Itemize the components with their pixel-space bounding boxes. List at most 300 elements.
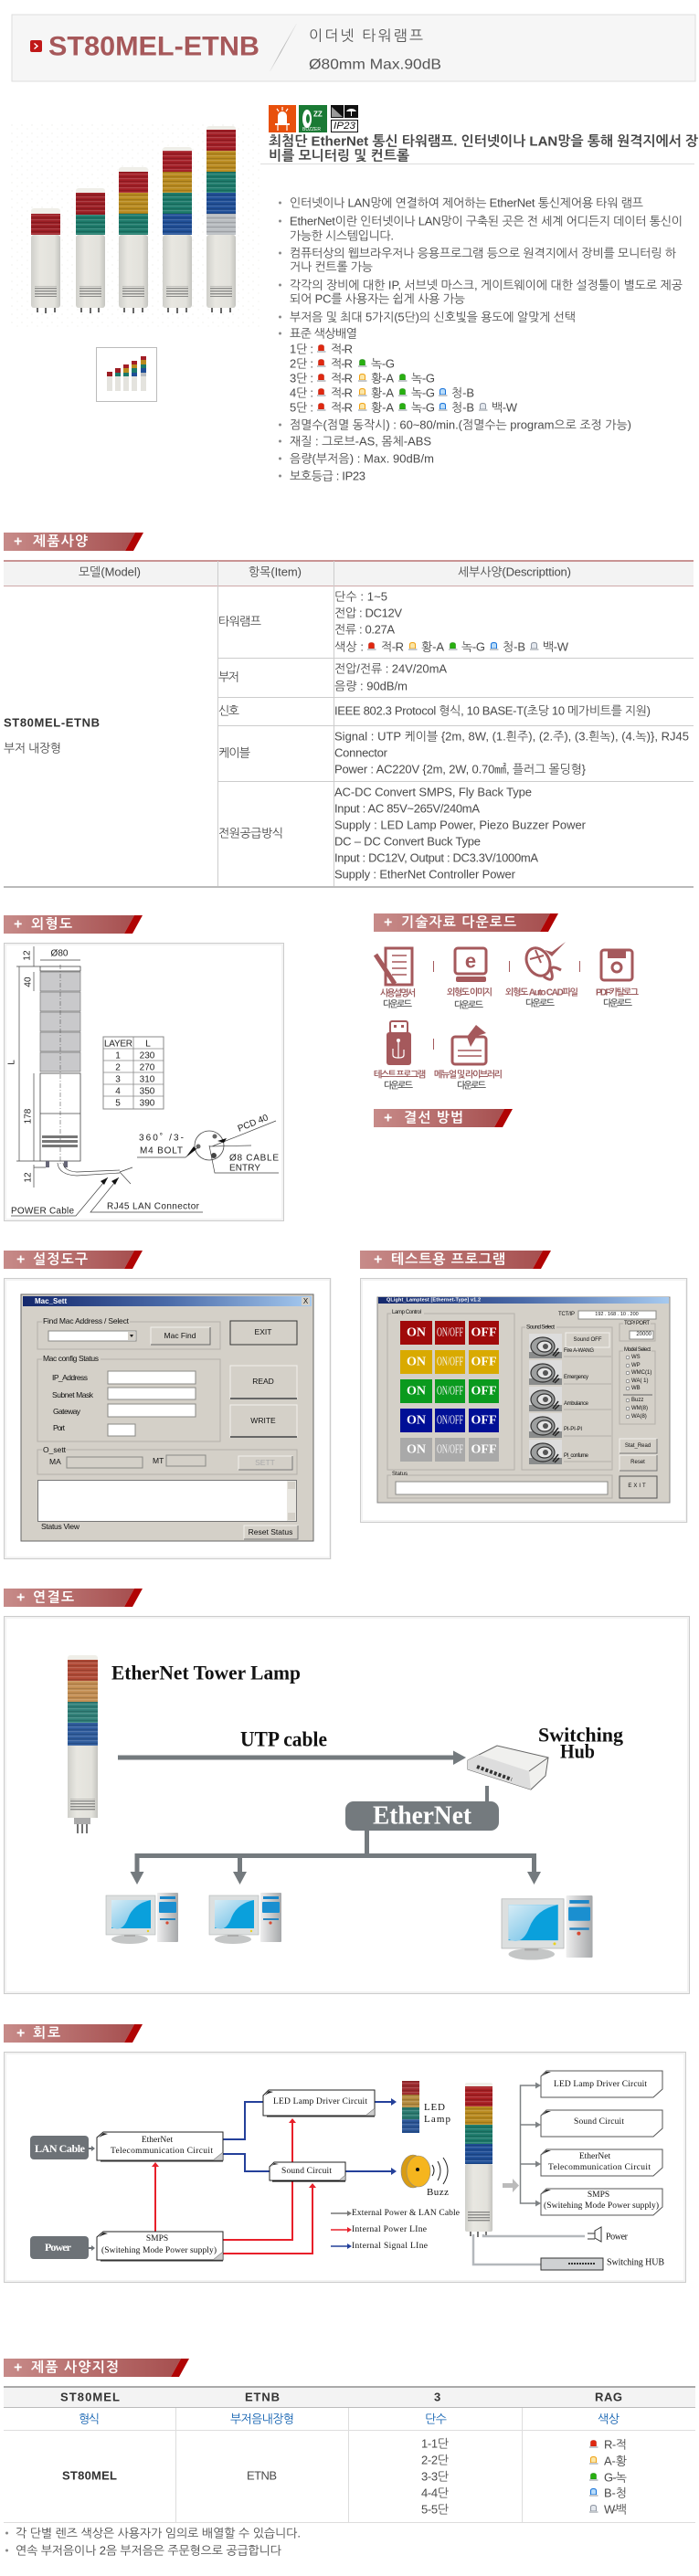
section banner: outline drawing: + bbox=[14, 917, 22, 932]
tower 4 layers bbox=[163, 147, 192, 313]
layer length table: 4 bbox=[115, 1087, 121, 1096]
section banner: product ordering: + bbox=[14, 2360, 22, 2375]
arrowheads: power bbox=[152, 2118, 316, 2188]
separator bbox=[579, 961, 580, 972]
cable description: Power : AC220V {2m, 2W, 0.70㎟, 플러그 몰딩형} bbox=[334, 762, 587, 776]
sound circuit box bbox=[270, 2162, 345, 2181]
exit button: EXIT bbox=[255, 1327, 271, 1336]
EtherNet telecommunication circuit box: EtherNet bbox=[142, 2136, 174, 2145]
layer length table: 3 bbox=[115, 1074, 121, 1085]
model select group: Model Select bbox=[624, 1347, 651, 1353]
intro heading bbox=[260, 133, 698, 164]
section banner: wiring method bbox=[374, 1109, 513, 1127]
icon: manual and library: 메뉴얼 및 라이브러리 bbox=[434, 1069, 503, 1080]
icon: PDF catalog bbox=[596, 950, 640, 1008]
status view: Reset Status bbox=[249, 1527, 292, 1536]
tower outline drawing bbox=[40, 965, 80, 1167]
layer length table: 390 bbox=[140, 1098, 155, 1109]
sound select group: Sound Select bbox=[526, 1325, 555, 1330]
cable drawing: RJ45 LAN Connector bbox=[107, 1202, 200, 1211]
thumbnail image bbox=[97, 347, 157, 402]
sound select group: PI_confume bbox=[564, 1453, 589, 1459]
icon: outline image bbox=[447, 948, 492, 1010]
section banner: configuration tool: + bbox=[16, 1251, 25, 1268]
feature list: 재질 : 그로브-AS, 몸체-ABS bbox=[290, 435, 431, 448]
tower lamp description: 황-A bbox=[421, 639, 444, 654]
layer length table: LAYER bbox=[104, 1040, 132, 1049]
icon: buzzer bbox=[299, 105, 327, 132]
yellow buttons: ON/OFF bbox=[437, 1356, 463, 1368]
type value: ETNB bbox=[247, 2468, 277, 2483]
tower 2 layers bbox=[76, 188, 105, 313]
O_sett group: MA bbox=[49, 1457, 61, 1466]
section banner: circuit bbox=[4, 2024, 143, 2043]
LED lamp image: LED bbox=[424, 2102, 445, 2113]
icon: PDF catalog: PDF카탈로그 bbox=[596, 987, 640, 998]
component box: SMPS: (Switehing Mode Power supply) bbox=[544, 2201, 659, 2211]
hub label bbox=[538, 1723, 623, 1763]
arrow: tower to components bbox=[503, 2179, 519, 2192]
feature list: 각각의 장비에 대한 IP, 서브넷 마스크, 게이트웨이에 대한 설정툴이 별도로 제공 bbox=[290, 278, 683, 292]
footnotes: 연속 부저음이나 2음 부저음은 주문형으로 공급합니다 bbox=[16, 2543, 281, 2558]
TCP/IP fields: 20000 bbox=[636, 1332, 652, 1337]
white buttons: ON/OFF bbox=[437, 1443, 463, 1456]
bolt detail drawing: 360˚ /3- bbox=[139, 1133, 184, 1144]
TCP/IP fields: TCT/IP bbox=[558, 1312, 575, 1317]
separator bbox=[433, 1039, 434, 1050]
dimension labels: 178 bbox=[24, 1108, 33, 1124]
icon: AutoCAD file: 다운로드 bbox=[525, 998, 556, 1008]
color arrangement rows: 2단 : bbox=[290, 356, 313, 371]
footnotes: 각 단별 렌즈 색상은 사용자가 임의로 배열할 수 있습니다. bbox=[16, 2527, 301, 2539]
green buttons: ON/OFF bbox=[437, 1385, 463, 1398]
yellow buttons: ON bbox=[407, 1356, 426, 1368]
color arrangement rows: 3단 : bbox=[290, 371, 313, 385]
panel: circuit diagram bbox=[4, 2052, 685, 2282]
label row: 부저음내장형 bbox=[230, 2412, 294, 2426]
feature list: 되어 PC를 사용자는 쉽게 사용 가능 bbox=[290, 292, 465, 305]
section banner: circuit: + bbox=[16, 2026, 25, 2041]
spec summary: Ø80mm Max.90dB bbox=[309, 57, 441, 73]
section banner: configuration tool bbox=[4, 1251, 143, 1269]
yellow buttons bbox=[400, 1350, 499, 1374]
color values: A-황 bbox=[604, 2454, 627, 2468]
icon: AutoCAD file: 외형도 Auto CAD파일 bbox=[505, 987, 578, 998]
dimension labels: Ø80 bbox=[51, 948, 69, 959]
feature icons bbox=[269, 105, 358, 132]
icon: buzzer: ZZ bbox=[313, 110, 323, 119]
color arrangement rows: 5단 : bbox=[290, 400, 313, 415]
EtherNet box bbox=[345, 1801, 499, 1831]
model cell: 부저 내장형 bbox=[4, 742, 61, 755]
header band bbox=[12, 15, 695, 81]
window title bar: X bbox=[303, 1297, 309, 1305]
code row: ETNB bbox=[245, 2390, 280, 2404]
tower lamp description: 전압 : DC12V bbox=[334, 607, 402, 619]
cable drawing bbox=[11, 1163, 203, 1217]
LAN cable box: LAN Cable bbox=[35, 2142, 86, 2155]
color arrangement rows: 1단 : bbox=[290, 342, 313, 356]
section banner: connection diagram: + bbox=[16, 1589, 25, 1606]
status group bbox=[387, 1471, 612, 1498]
section banner: product specifications bbox=[4, 533, 143, 551]
window title bar: QLight_Lamptest [Ethernet-Type] v1.2 bbox=[387, 1297, 481, 1303]
table header: 항목(Item) bbox=[249, 565, 302, 579]
icon: revolving light bbox=[269, 105, 296, 132]
color arrangement rows: 황-A bbox=[371, 371, 394, 385]
table header: 모델(Model) bbox=[79, 565, 141, 579]
SMPS box: SMPS bbox=[146, 2234, 168, 2243]
red buttons: OFF bbox=[471, 1326, 497, 1339]
EtherNet box: EtherNet bbox=[373, 1801, 472, 1831]
model value: ST80MEL bbox=[62, 2468, 117, 2483]
section banner: product ordering: 제품 사양지정 bbox=[31, 2360, 119, 2375]
component box: telecommunication: Telecommunication Circuit bbox=[548, 2163, 651, 2172]
item column: 신호 bbox=[218, 703, 239, 718]
status view: Status View bbox=[41, 1522, 80, 1531]
power supply description: Input : DC12V, Output : DC3.3V/1000mA bbox=[334, 851, 538, 864]
icon: PDF catalog: 다운로드 bbox=[603, 998, 633, 1008]
label row: 단수 bbox=[425, 2412, 447, 2426]
layer length table: 270 bbox=[140, 1063, 155, 1072]
icon: outline image: e bbox=[465, 950, 476, 972]
section banner: wiring method: + bbox=[384, 1111, 392, 1125]
layer length table: 350 bbox=[140, 1087, 155, 1096]
title: ST80MEL-ETNB bbox=[48, 31, 259, 62]
component box: SMPS bbox=[541, 2189, 662, 2215]
spec table bbox=[4, 560, 694, 888]
download grid bbox=[374, 942, 640, 1091]
panel: Mac_Sett configuration window bbox=[4, 1279, 331, 1558]
color arrangement rows: 녹-G bbox=[411, 400, 435, 415]
EtherNet telecommunication circuit box bbox=[97, 2132, 223, 2161]
sound select group: Sound OFF bbox=[573, 1337, 602, 1343]
config group: Mac config Status bbox=[43, 1354, 99, 1363]
section banner: test program bbox=[360, 1251, 551, 1269]
LED lamp image bbox=[402, 2081, 451, 2133]
bolt detail drawing: Ø8 CABLE bbox=[229, 1153, 279, 1164]
config group: Gateway bbox=[53, 1407, 81, 1416]
power box bbox=[30, 2236, 95, 2259]
layer values: 2-2단 bbox=[421, 2454, 449, 2466]
signal lines bbox=[223, 2102, 395, 2171]
find group bbox=[37, 1316, 220, 1349]
hub label: Hub bbox=[560, 1739, 595, 1763]
tower lamp description bbox=[334, 590, 569, 654]
icon: red arrow bullet bbox=[30, 40, 42, 52]
section banner: connection diagram bbox=[4, 1589, 143, 1607]
section banner: configuration tool: 설정도구 bbox=[33, 1251, 88, 1266]
layer length table: 230 bbox=[140, 1050, 155, 1061]
layer values: 5-5단 bbox=[421, 2503, 449, 2516]
feature list: 거나 컨트롤 가능 bbox=[290, 259, 373, 274]
color arrangement rows: 녹-G bbox=[371, 356, 395, 371]
color arrangement rows bbox=[290, 342, 518, 415]
yellow buttons: OFF bbox=[471, 1356, 497, 1368]
divider slash bbox=[270, 24, 297, 71]
section banner: technical downloads: 기술자료 다운로드 bbox=[401, 915, 516, 930]
O_sett group: MT bbox=[153, 1456, 164, 1465]
config group: Subnet Mask bbox=[52, 1390, 94, 1399]
model select group: WMC(1) bbox=[631, 1370, 651, 1376]
sound select group: Fire A-WANG bbox=[564, 1348, 594, 1354]
blue buttons: ON/OFF bbox=[437, 1414, 463, 1427]
model select group: WA( 1) bbox=[631, 1378, 648, 1384]
LAN cable box bbox=[30, 2136, 95, 2159]
arrows: distribution to computers bbox=[130, 1831, 541, 1884]
separator bbox=[509, 961, 510, 972]
feature list: 가능한 시스템입니다. bbox=[290, 228, 394, 243]
color arrangement rows: 적-R bbox=[331, 356, 353, 371]
dimension labels: 12 bbox=[24, 1172, 33, 1183]
layer values: 4-4단 bbox=[421, 2486, 449, 2499]
LED lamp driver circuit box: LED Lamp Driver Circuit bbox=[273, 2097, 367, 2106]
icon: outline image: 외형도 이미지 bbox=[447, 987, 492, 998]
color arrangement rows: 청-B bbox=[451, 400, 474, 415]
arrows: component tree bbox=[521, 2083, 541, 2207]
section banner: circuit: 회로 bbox=[33, 2026, 60, 2041]
section banner: outline drawing bbox=[4, 915, 143, 934]
color arrangement rows: 적-R bbox=[331, 371, 353, 385]
icon: switching hub bbox=[468, 1746, 548, 1789]
table header: 세부사양(Descripttion) bbox=[458, 565, 571, 579]
icon: test program bbox=[374, 1021, 426, 1091]
panel: test program window bbox=[360, 1279, 687, 1522]
dimension labels bbox=[7, 946, 80, 1188]
product photo: five tower lamps bbox=[9, 121, 260, 329]
LED lamp image: Lamp bbox=[424, 2114, 451, 2125]
arrowheads: signal bbox=[391, 2098, 397, 2175]
component box: LED driver: LED Lamp Driver Circuit bbox=[554, 2080, 647, 2089]
power supply description: Supply : EtherNet Controller Power bbox=[334, 868, 516, 881]
green buttons: ON bbox=[407, 1385, 426, 1398]
component box: telecommunication: EtherNet bbox=[579, 2152, 611, 2161]
switching hub device bbox=[473, 2234, 664, 2270]
layer length table: 1 bbox=[115, 1050, 121, 1061]
section banner: product ordering bbox=[4, 2359, 189, 2377]
window title bar bbox=[378, 1297, 669, 1304]
tower 5 layers bbox=[207, 126, 236, 313]
section banner: technical downloads bbox=[374, 913, 558, 932]
cable description: Connector bbox=[334, 745, 388, 760]
blue buttons bbox=[400, 1409, 499, 1432]
item column: 전원공급방식 bbox=[218, 826, 283, 840]
power box: Power bbox=[45, 2241, 72, 2254]
layer length table: 310 bbox=[140, 1074, 155, 1085]
layer values: 3-3단 bbox=[421, 2470, 449, 2483]
bolt detail drawing: ENTRY bbox=[229, 1164, 260, 1173]
layer length table: 5 bbox=[115, 1098, 121, 1109]
model select group: WB bbox=[631, 1386, 641, 1391]
color values: G-녹 bbox=[604, 2470, 627, 2485]
bolt detail drawing: M4 BOLT bbox=[140, 1145, 183, 1156]
color arrangement rows: 황-A bbox=[371, 385, 394, 400]
TCP/IP fields bbox=[558, 1311, 656, 1341]
read and write buttons bbox=[230, 1366, 297, 1437]
feature list: 부저음 및 최대 5가지(5단)의 신호빛을 용도에 알맞게 선택 bbox=[290, 311, 576, 323]
read and write buttons: WRITE bbox=[250, 1416, 276, 1425]
footnotes bbox=[5, 2527, 301, 2558]
status view bbox=[38, 1480, 298, 1539]
read and write buttons: READ bbox=[252, 1377, 274, 1386]
feature list: EtherNet이란 인터넷이나 LAN망이 구축된 곳은 전 세계 어디든지 데이터 통신이 bbox=[290, 214, 683, 228]
window title bar: Mac_Sett bbox=[35, 1297, 67, 1305]
red buttons bbox=[400, 1321, 499, 1345]
section banner: test program: + bbox=[374, 1251, 382, 1268]
icon: buzzer bbox=[401, 2155, 449, 2198]
EtherNet telecommunication circuit box: Telecommunication Circuit bbox=[111, 2147, 213, 2156]
layer length table: 2 bbox=[115, 1063, 121, 1072]
green buttons: OFF bbox=[471, 1385, 497, 1398]
sound select group: Emergency bbox=[564, 1375, 588, 1380]
power supply description: DC – DC Convert Buck Type bbox=[334, 835, 481, 848]
cable description: Signal : UTP 케이블 {2m, 8W, (1.흰주), (2.주), (3.흰녹), (4.녹)}, RJ45 bbox=[334, 729, 689, 744]
O_sett group: SETT bbox=[255, 1458, 275, 1467]
window title bar bbox=[23, 1296, 312, 1306]
section banner: test program: 테스트용 프로그램 bbox=[391, 1251, 505, 1266]
sound circuit box: Sound Circuit bbox=[281, 2167, 332, 2176]
red buttons: ON bbox=[407, 1326, 426, 1339]
color arrangement rows: 4단 : bbox=[290, 385, 313, 400]
buzzer description: 음량 : 90dB/m bbox=[334, 680, 408, 692]
hub connector line bbox=[485, 1786, 489, 1802]
tower lamp description: 녹-G bbox=[461, 639, 485, 654]
power supply description: Input : AC 85V~265V/240mA bbox=[334, 802, 480, 815]
layer length table bbox=[103, 1037, 164, 1109]
power lines bbox=[155, 2121, 312, 2254]
color values bbox=[589, 2437, 627, 2516]
tower 1 layer bbox=[31, 208, 60, 313]
layer values bbox=[421, 2437, 449, 2516]
panel: dimension drawing bbox=[4, 943, 283, 1220]
layer length table: L bbox=[145, 1040, 151, 1049]
dimension labels: L bbox=[7, 1060, 16, 1065]
feature list: 음량(부저음) : Max. 90dB/m bbox=[290, 451, 434, 466]
side buttons bbox=[620, 1439, 657, 1498]
section banner: connection diagram: 연결도 bbox=[33, 1589, 74, 1604]
icon: AutoCAD file bbox=[505, 942, 578, 1008]
icon: manual and library bbox=[434, 1025, 503, 1091]
model cell bbox=[4, 716, 100, 755]
blue buttons: OFF bbox=[471, 1414, 497, 1427]
icon: IP23 badge: IP23 bbox=[334, 121, 356, 132]
color arrangement rows: 백-W bbox=[492, 400, 518, 415]
dimension labels: 12 bbox=[22, 950, 33, 961]
section banner: product specifications: + bbox=[14, 533, 22, 550]
model select group: WA(8) bbox=[631, 1414, 647, 1420]
feature list: 표준 색상배열 bbox=[290, 327, 357, 340]
icon: user manual: 다운로드 bbox=[383, 999, 413, 1010]
LED lamp driver circuit box bbox=[263, 2090, 375, 2117]
code row: ST80MEL bbox=[60, 2390, 120, 2404]
line legend bbox=[331, 2209, 460, 2251]
model select group: Buzz bbox=[631, 1398, 643, 1403]
color arrangement rows: 녹-G bbox=[411, 371, 435, 385]
sound select group: PI-PI-PI bbox=[564, 1427, 582, 1432]
color arrangement rows: 청-B bbox=[451, 385, 474, 400]
side buttons: Reset bbox=[630, 1460, 645, 1465]
bolt detail drawing bbox=[137, 1113, 279, 1173]
config group: Port bbox=[53, 1423, 66, 1432]
status group: Status bbox=[392, 1472, 408, 1477]
code row: RAG bbox=[595, 2390, 622, 2404]
icon: test program: 다운로드 bbox=[384, 1080, 414, 1091]
color arrangement rows: 적-R bbox=[331, 342, 353, 356]
color arrangement rows: 황-A bbox=[371, 400, 394, 415]
sound select group bbox=[522, 1323, 612, 1470]
tower lamp description: 색상 : bbox=[334, 639, 364, 654]
hub label: Switching bbox=[538, 1723, 623, 1747]
feature list: 보호등급 : IP23 bbox=[290, 470, 365, 482]
component box: LED driver bbox=[541, 2071, 662, 2097]
icon: dust protection bbox=[331, 105, 344, 118]
item column bbox=[218, 614, 283, 840]
cable description bbox=[334, 729, 689, 776]
component box: SMPS: SMPS bbox=[588, 2191, 609, 2200]
model select group: WS bbox=[631, 1355, 641, 1360]
model cell: ST80MEL-ETNB bbox=[4, 716, 100, 729]
section banner: wiring method: 결선 방법 bbox=[404, 1111, 463, 1125]
subtitle: 이더넷 타워램프 bbox=[309, 27, 423, 44]
intro heading: 비를 모니터링 및 컨트롤 bbox=[269, 148, 409, 164]
icon: computer 1 bbox=[106, 1893, 178, 1944]
component box: sound: Sound Circuit bbox=[574, 2117, 624, 2127]
blue buttons: ON bbox=[407, 1414, 426, 1427]
sound select group: Ambulance bbox=[564, 1401, 589, 1407]
icon: user manual: 사용설명서 bbox=[380, 988, 416, 999]
icon: manual and library: 다운로드 bbox=[457, 1080, 487, 1091]
lamp control group bbox=[387, 1309, 514, 1470]
signal description: IEEE 802.3 Protocol 형식, 10 BASE-T(초당 10 메가비트를 지원) bbox=[334, 703, 651, 718]
label row: 형식 bbox=[79, 2412, 100, 2426]
find group: Find Mac Address / Select bbox=[43, 1316, 130, 1325]
feature list: 컴퓨터상의 웹브라우저나 응용프로그램 등으로 원격지에서 장비를 모니터링 하 bbox=[290, 247, 676, 259]
arrow: UTP cable to hub bbox=[118, 1750, 466, 1765]
exit button bbox=[230, 1321, 297, 1345]
label row bbox=[79, 2412, 620, 2426]
buzzer description: 전압/전류 : 24V/20mA bbox=[334, 661, 447, 676]
model select group: WM(8) bbox=[631, 1406, 648, 1411]
code row: 3 bbox=[434, 2390, 440, 2404]
switching hub device: Switching HUB bbox=[607, 2258, 664, 2267]
power plug: Power bbox=[606, 2233, 629, 2242]
power supply description: AC-DC Convert SMPS, Fly Back Type bbox=[334, 786, 532, 798]
lamp label: EtherNet Tower Lamp bbox=[111, 1661, 301, 1684]
color values: W-백 bbox=[604, 2503, 627, 2516]
TCP/IP fields: 192 . 168 . 10 . 200 bbox=[595, 1312, 639, 1317]
white buttons bbox=[400, 1438, 499, 1462]
side buttons: Stat_Read bbox=[625, 1443, 651, 1449]
find group: Mac Find bbox=[164, 1331, 196, 1340]
color values: B-청 bbox=[604, 2486, 627, 2499]
power plug bbox=[483, 2227, 629, 2242]
icon: outline image: 다운로드 bbox=[454, 999, 484, 1010]
O_sett group bbox=[37, 1445, 297, 1474]
section banner: product specifications: 제품사양 bbox=[33, 533, 88, 548]
side buttons: EXIT bbox=[628, 1483, 648, 1489]
tower lamp description: 백-W bbox=[543, 639, 569, 654]
large tower lamp bbox=[465, 2083, 492, 2237]
color values: R-적 bbox=[604, 2437, 627, 2452]
icon: user manual bbox=[376, 948, 416, 1010]
cable drawing: POWER Cable bbox=[11, 1206, 74, 1217]
feature list: 점멸수(점멸 동작시) : 60~80/min.(점멸수는 program으로 조정 가능) bbox=[290, 418, 631, 431]
table header bbox=[79, 565, 571, 579]
tower lamp description: 단수 : 1~5 bbox=[334, 590, 387, 603]
bolt detail drawing: PCD 40 bbox=[237, 1113, 270, 1135]
item column: 타워램프 bbox=[218, 614, 261, 628]
TCP/IP fields: TCP/ PORT bbox=[624, 1321, 650, 1326]
